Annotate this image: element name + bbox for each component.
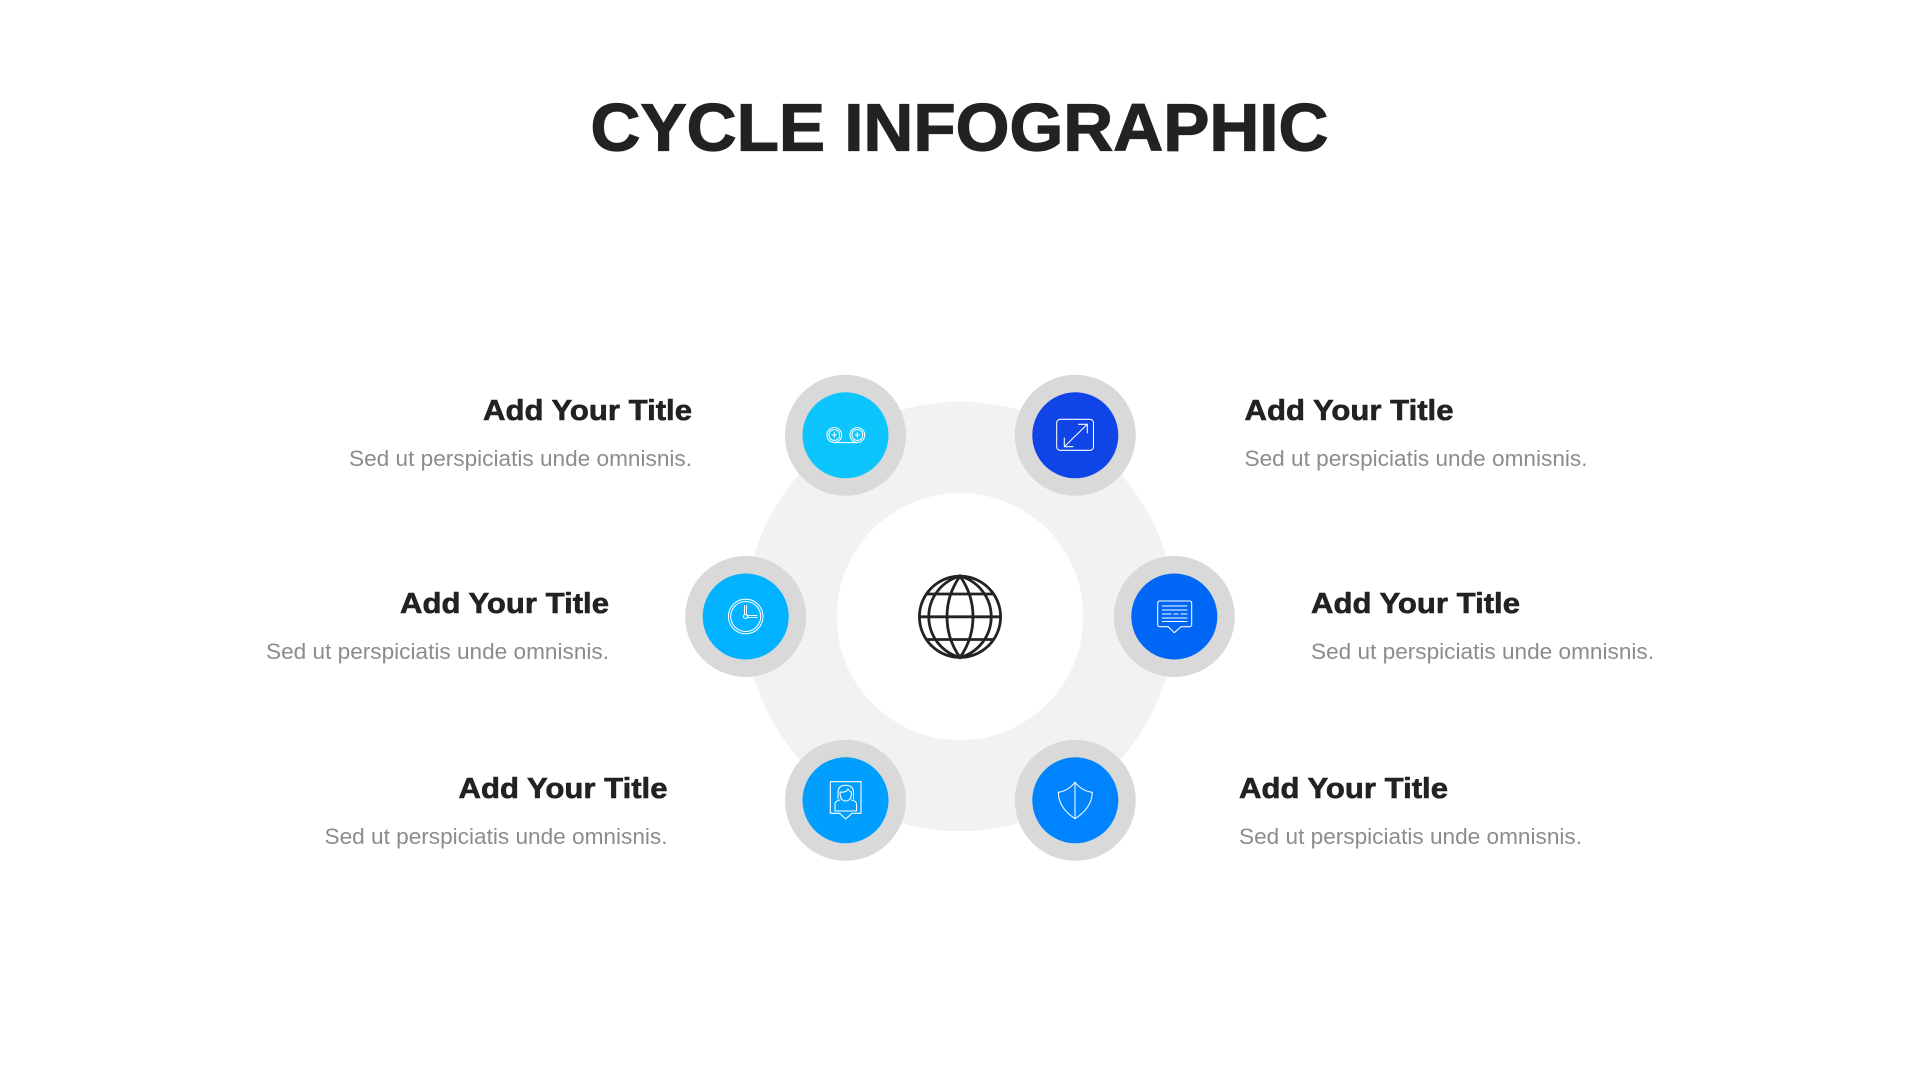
icon: shield — [1058, 782, 1092, 819]
label: top left: Add Your Title — [483, 395, 692, 427]
icon: clock — [728, 599, 763, 634]
node: top left, tape icon — [785, 375, 906, 496]
label: middle left — [266, 588, 609, 664]
icon: tape — [827, 428, 865, 443]
label: bottom right: Sed ut perspiciatis unde omnisnis. — [1239, 824, 1582, 849]
title: CYCLE INFOGRAPHIC — [590, 90, 1328, 165]
label: top right: Sed ut perspiciatis unde omnisnis. — [1244, 446, 1588, 471]
cycle ring — [745, 402, 1175, 831]
label: bottom left: Add Your Title — [458, 773, 668, 805]
label: bottom left — [324, 773, 668, 849]
node: bottom left, person icon — [785, 740, 906, 861]
icon: expand — [1057, 419, 1094, 450]
label: middle left: Sed ut perspiciatis unde omnisnis. — [266, 639, 609, 664]
icon: globe — [919, 576, 1001, 657]
node: bottom right, shield icon — [1015, 740, 1136, 861]
label: bottom left: Sed ut perspiciatis unde omnisnis. — [324, 824, 668, 849]
label: middle right: Add Your Title — [1311, 588, 1520, 620]
icon: person — [830, 782, 861, 819]
label: bottom right: Add Your Title — [1239, 773, 1448, 805]
node: middle left, clock icon — [685, 556, 806, 677]
label: top left: Sed ut perspiciatis unde omnisnis. — [349, 446, 692, 471]
label: middle left: Add Your Title — [400, 588, 609, 620]
icon: chat — [1158, 601, 1192, 633]
label: bottom right — [1239, 773, 1582, 849]
label: top left — [349, 395, 692, 471]
label: top right: Add Your Title — [1244, 395, 1454, 427]
node: top right, expand icon — [1015, 375, 1136, 496]
label: middle right: Sed ut perspiciatis unde omnisnis. — [1311, 639, 1654, 664]
label: middle right — [1311, 588, 1654, 664]
label: top right — [1244, 395, 1588, 471]
node: middle right, chat icon — [1114, 556, 1235, 677]
